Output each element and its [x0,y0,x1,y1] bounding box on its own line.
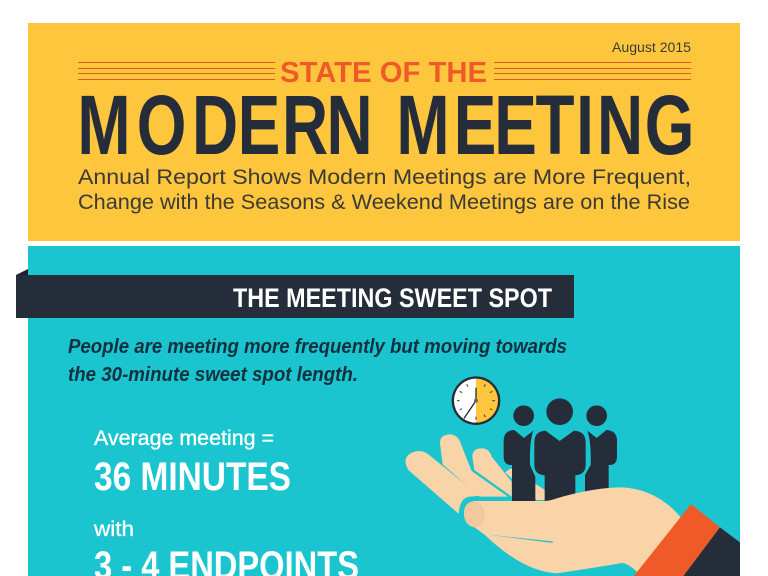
icon: people [504,398,617,502]
left decorative lines [78,62,275,80]
banner: the meeting sweet spot [16,269,574,318]
stat: endpoints: with [93,517,134,541]
center person [534,398,586,502]
illustration: hand holding people and clock [405,376,740,576]
stat: endpoints [93,517,359,576]
date label: August 2015 [612,40,691,55]
hand crease lines [485,534,553,543]
icon: clock [452,376,500,425]
stat: average meeting: Average meeting = [94,426,274,450]
title: modern meeting: MODERN MEETING [77,77,694,172]
hand: fingers behind people [405,434,545,515]
panel: yellow header [28,23,740,241]
sleeve [682,527,740,576]
banner: the meeting sweet spot: THE MEETING SWEET SPOT [233,283,552,313]
intro text: People are meeting more frequently but moving towards [68,336,567,358]
side persons [504,405,617,502]
subtitle: Annual Report Shows Modern Meetings are More Frequent, [78,166,691,189]
intro text: the 30-minute sweet spot length. [68,364,358,386]
thumb nail [465,502,484,527]
stat: average meeting [94,426,291,499]
subtitle [78,166,691,214]
stat: average meeting: 36 MINUTES [94,455,291,499]
cuff [632,504,720,576]
subtitle: Change with the Seasons & Weekend Meetings are on the Rise [78,191,690,214]
heading: state of the: STATE OF THE [280,57,487,89]
intro text [68,336,567,386]
hand: palm and thumb [464,487,690,576]
right decorative lines [494,62,691,80]
panel: teal section [28,246,740,576]
